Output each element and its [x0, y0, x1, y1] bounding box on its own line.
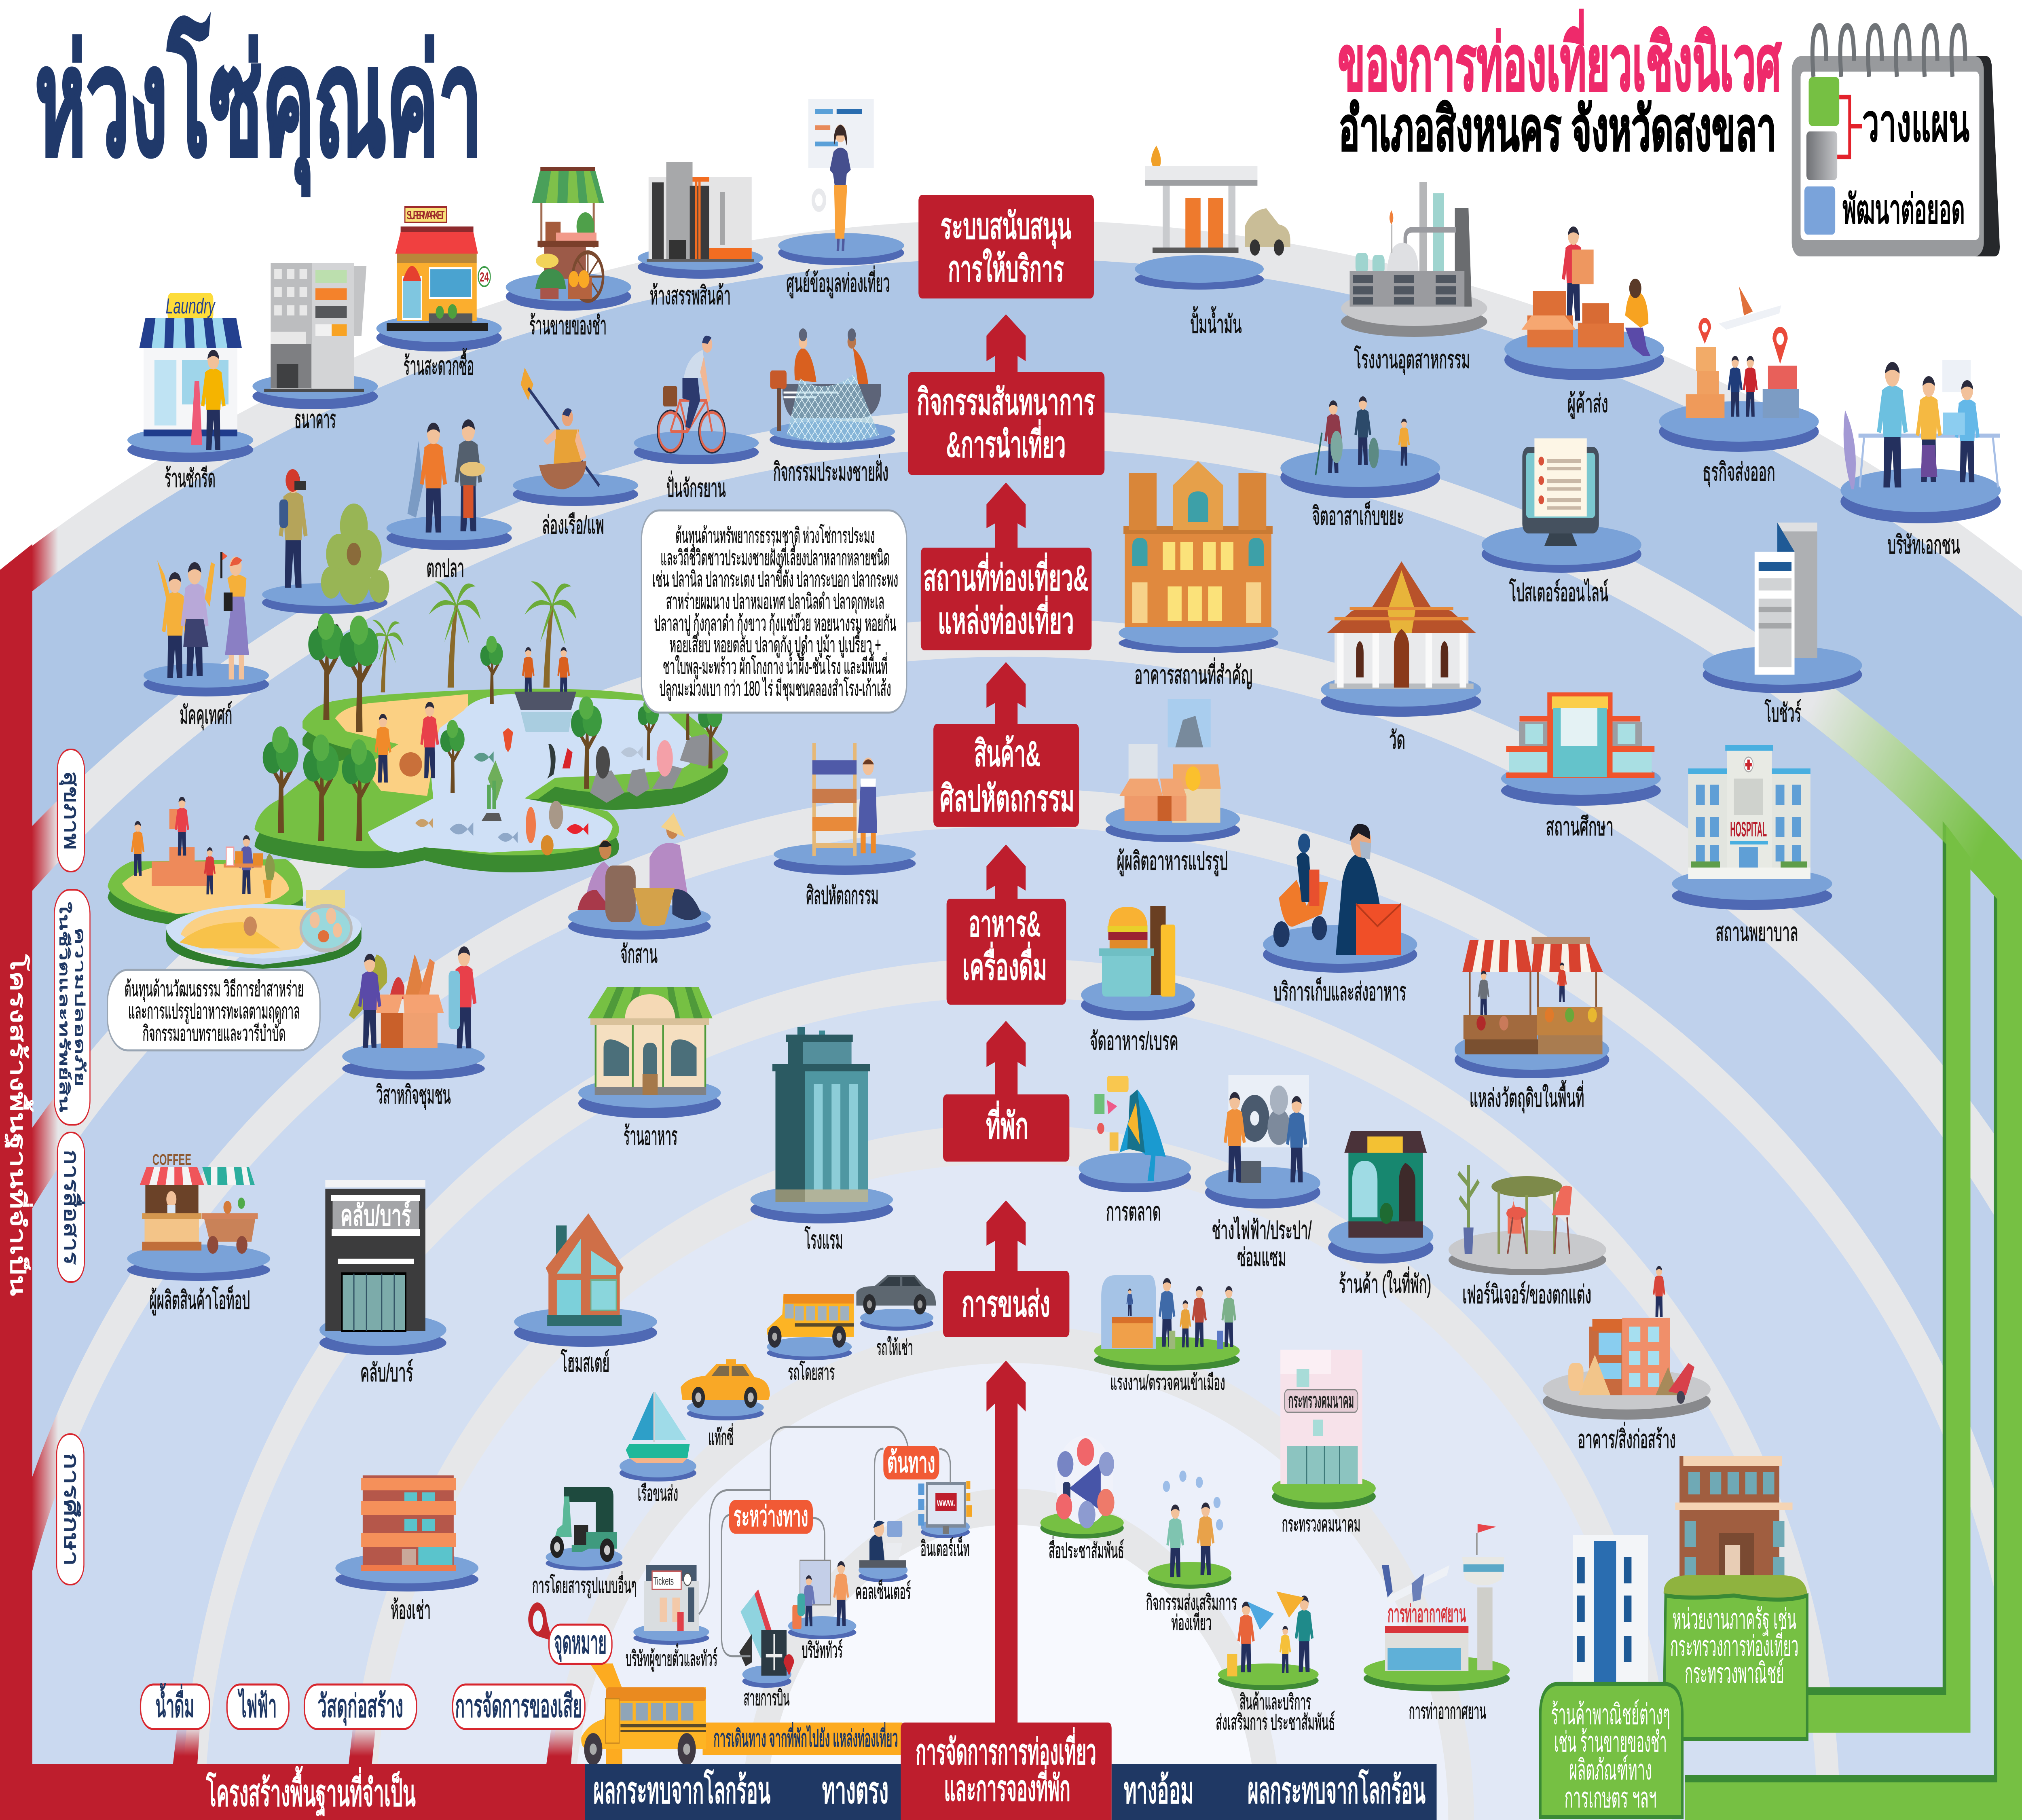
island: culture: [108, 797, 362, 969]
label: ธุรกิจส่งออก: [1703, 458, 1775, 487]
label: โฮมสเตย์: [561, 1349, 609, 1377]
box: support services: ระบบสนับสนุน: [941, 205, 1071, 249]
label: ห้างสรรพสินค้า: [650, 281, 731, 309]
green panel: government agencies: กระทรวงพาณิชย์: [1685, 1658, 1784, 1689]
bottom bar: essential infrastructure: [0, 1764, 585, 1820]
icon: export boxes, pins and plane: [1686, 286, 1799, 418]
destination pin and tag: [528, 1602, 612, 1664]
item: processed food: [1106, 699, 1240, 876]
pill: construction materials: [304, 1685, 417, 1729]
icon: school bus: [767, 1294, 854, 1348]
icon: ticket and runway: [739, 1589, 794, 1676]
label: ร้านค้า (ในที่พัก): [1339, 1266, 1431, 1298]
item: catering: [1081, 906, 1195, 1055]
arrow: [986, 844, 1026, 902]
label: จัดอาหาร/เบรค: [1090, 1027, 1178, 1055]
icon: passport control: [1101, 1275, 1236, 1349]
label: การโดยสารรูปแบบอื่นๆ: [532, 1571, 637, 1598]
icon: monitor with poster: [1522, 438, 1599, 546]
aquatic animals: [415, 728, 673, 855]
label: สื่อประชาสัมพันธ์: [1049, 1536, 1124, 1563]
icon: ticket booth: Tickets: [653, 1575, 674, 1587]
label: กิจกรรมประมงชายฝั่ง: [773, 454, 888, 486]
frame: green arc and green bars on the right: [1466, 488, 2022, 1820]
icon: school building: [1506, 692, 1654, 778]
label: ตกปลา: [426, 554, 464, 582]
fishermen and net: [514, 647, 576, 732]
green panel: government agencies: หน่วยงานภาครัฐ เช่น: [1673, 1604, 1796, 1636]
bottom bar: indirect impact: ผลกระทบจากโลกร้อน: [1248, 1769, 1426, 1811]
label: คอลเซ็นเตอร์: [855, 1579, 911, 1604]
icon: boxes and people: [1521, 226, 1650, 356]
item: club and bar: [319, 1180, 446, 1386]
arrow: [986, 662, 1026, 727]
label: ศิลปหัตถกรรม: [806, 881, 879, 909]
label two: ส่งเสริมการ ประชาสัมพันธ์: [1216, 1711, 1335, 1734]
item: food delivery: [1263, 824, 1417, 1005]
box: accommodation: [943, 1094, 1069, 1162]
label: แท๊กซี่: [708, 1423, 734, 1450]
label: บริการเก็บและส่งอาหาร: [1273, 977, 1406, 1005]
icon: heritage building: [1123, 461, 1273, 627]
box: goods and crafts: [933, 724, 1079, 827]
icon: government building: [1675, 1456, 1792, 1577]
label: เรือขนส่ง: [638, 1482, 678, 1505]
item: grocery: [506, 167, 631, 339]
item: immigration: [1094, 1275, 1240, 1395]
box: recreation: [908, 372, 1104, 475]
item: internet: [918, 1481, 972, 1561]
green panel: commercial shops: เช่น ร้านขายของชำ: [1554, 1727, 1667, 1758]
icon: factory: [1350, 182, 1472, 307]
label: คลับ/บาร์: [360, 1359, 413, 1386]
label: ปั้มน้ำมัน: [1190, 306, 1242, 338]
island: natural resources: [254, 581, 728, 872]
bottom bar: indirect impact: [1112, 1764, 1436, 1820]
icon: Thai temple: [1327, 561, 1476, 689]
text box: natural resources: สาหร่ายผมนาง ปลาหมอเทศ ปลานิลดำ ปลาดุกทะเล: [666, 590, 884, 614]
box: transport: การขนส่ง: [962, 1283, 1050, 1324]
icon: two anglers: [408, 419, 485, 533]
box: food and drink: [947, 899, 1066, 1005]
label one: สินค้าและบริการ: [1239, 1691, 1311, 1714]
item: local raw materials: [1455, 937, 1609, 1113]
icon: laundry shop: Laundry: [166, 294, 216, 318]
icon: tuk tuk: [550, 1487, 617, 1562]
icon: agent at desk: [859, 1521, 906, 1568]
item: rental rooms: [335, 1475, 478, 1624]
item: heritage buildings: [1119, 461, 1278, 689]
label one: กิจกรรมส่งเสริมการ: [1146, 1591, 1237, 1615]
item: education: [1501, 692, 1661, 840]
bottom bar: indirect impact: ทางอ้อม: [1124, 1770, 1193, 1811]
rocks: [590, 734, 725, 803]
label: อาคารสถานที่สำคัญ: [1134, 657, 1252, 689]
green panel: government agencies: [1664, 1456, 1807, 1739]
text box: natural resources: ต้นทุนด้านทรัพยากรธรรมชาติ ห่วงโซ่การประมง: [675, 523, 875, 548]
item: temple: [1321, 561, 1481, 754]
mangrove and fruit trees: [263, 613, 722, 841]
item: Ministry of Transport: [1272, 1350, 1376, 1536]
icon: paper planes and team: [1227, 1591, 1313, 1676]
label: โรงแรม: [804, 1226, 843, 1254]
central bar: tourism management: การจัดการการท่องเที่ยว: [916, 1727, 1096, 1772]
icon: green shop: [1344, 1131, 1427, 1238]
label: สายการบิน: [744, 1687, 790, 1710]
item: ticket agents: [626, 1565, 717, 1672]
pill: communication: [57, 1132, 85, 1282]
icon: club building: [325, 1180, 425, 1331]
icon: market stalls: [1462, 937, 1603, 1054]
left red column: [0, 544, 34, 1764]
label: โรงงานอุตสาหกรรม: [1354, 345, 1470, 375]
icon: office team: [1844, 360, 2000, 489]
icon: guide with tourists: [157, 552, 249, 679]
green panel: commercial shops: การเกษตร ฯลฯ: [1564, 1782, 1657, 1814]
tag: origin: ต้นทาง: [887, 1447, 935, 1479]
icon: ticket booth: [644, 1565, 699, 1631]
legend: calendar: [1792, 26, 2000, 256]
item: community product stall: [127, 1151, 270, 1316]
icon: delivery man and scooter: [1273, 824, 1401, 955]
item: waste volunteers: [1280, 396, 1440, 530]
stems from bottom bar: [173, 1729, 574, 1767]
label: ปั่นจักรยาน: [666, 470, 726, 502]
label: จิตอาสาเก็บขยะ: [1312, 501, 1404, 530]
icon: bank building: [264, 263, 366, 392]
item: fishing: [387, 419, 512, 582]
pill: waste management: การจัดการของเสีย: [455, 1688, 582, 1724]
text box: culture: ต้นทุนด้านวัฒนธรรม วิธีการยำสาหร่าย: [124, 978, 304, 1002]
subtitle: location: อำเภอสิงหนคร จังหวัดสงขลา: [1339, 95, 1776, 163]
label: โปสเตอร์ออนไลน์: [1509, 578, 1608, 606]
label: ร้านอาหาร: [624, 1122, 677, 1150]
box: recreation: &การนำเที่ยว: [946, 419, 1066, 465]
arrow: [986, 483, 1026, 551]
legend swatch: green: [1808, 77, 1839, 126]
pill: construction materials: วัสดุก่อสร้าง: [317, 1688, 403, 1726]
icon: sail boat: [626, 1392, 690, 1463]
icon: building under construction: [1568, 1266, 1694, 1404]
icon: taxi: [681, 1359, 770, 1408]
box: attractions: แหล่งท่องเที่ยว: [938, 595, 1074, 641]
legend swatch: blue: [1804, 186, 1835, 235]
icon: gas station: [1145, 146, 1290, 256]
box: transport: [943, 1271, 1069, 1337]
label: แรงงาน/ตรวจคนเข้าเมือง: [1110, 1371, 1225, 1395]
item: wholesaler: [1504, 226, 1664, 419]
item: taxi: [681, 1359, 770, 1450]
item: gas station: [1135, 146, 1290, 338]
icon: table, stools and plant: [1458, 1165, 1572, 1254]
box: attractions: สถานที่ท่องเที่ยว&: [923, 552, 1089, 598]
label: อินเตอร์เน็ท: [920, 1536, 970, 1561]
icon: ministry tower: [1280, 1350, 1362, 1484]
item: private company: [1840, 360, 2001, 559]
pill: drinking water: [141, 1682, 209, 1729]
box: support services: การให้บริการ: [948, 248, 1064, 289]
label: รถโดยสาร: [788, 1360, 835, 1384]
pill: health: [57, 749, 85, 872]
icon: apartment block: [361, 1475, 456, 1571]
icon: club building: คลับ/บาร์: [341, 1199, 411, 1232]
road to destination: [590, 1663, 622, 1764]
icon: supermarket: [387, 207, 490, 331]
item: tourism promotion: [1146, 1471, 1237, 1635]
connector lines: origin and en route: [699, 1427, 950, 1656]
item: information centre: [778, 99, 904, 298]
road band: travel from lodging to attractions: การเดินทาง จากที่พักไปยัง แหล่งท่องเที่ยว: [713, 1722, 898, 1752]
label: ร้านขายของชำ: [529, 311, 607, 339]
green panel: government agencies: กระทรวงการท่องเที่ยว: [1670, 1627, 1798, 1662]
text box: culture: และการแปรรูปอาหารทะเลตามฤดูกาล: [128, 1000, 300, 1024]
item: convenience store: [376, 207, 502, 380]
item: hospital: [1672, 745, 1832, 946]
item: furniture: [1449, 1165, 1606, 1308]
icon: hospital building: [1688, 745, 1810, 879]
pill: communication: การสื่อสาร: [61, 1149, 85, 1265]
pill: electricity: [227, 1685, 289, 1729]
label: บริษัทผู้ขายตั๋วและทัวร์: [626, 1644, 717, 1672]
icon: hotel tower: [772, 1027, 870, 1202]
label: บริษัทเอกชน: [1887, 531, 1960, 559]
box: food and drink: เครื่องดื่ม: [962, 941, 1047, 987]
label: มัคคุเทศก์: [180, 701, 232, 730]
text box: natural resources: ปลาลาปู กุ้งกุลาดำ กุ้งขาว กุ้งแช่บ๊วย หอยนางรม หอยกัน: [654, 612, 896, 636]
item: technicians: [1205, 1075, 1320, 1271]
text box: natural resources: หอยเสียบ หอยตลับ ปลาดูกัง ปูดำ ปูม้า ปูเปรี้ยว +: [669, 630, 881, 658]
label: ศูนย์ข้อมูลท่องเที่ยว: [786, 265, 890, 298]
label: ร้านซักรีด: [165, 464, 216, 492]
label: วัด: [1389, 726, 1405, 754]
arrow: [986, 1021, 1026, 1096]
pill: education: การศึกษา: [61, 1453, 82, 1566]
box: attractions: [921, 548, 1091, 650]
label: ร้านสะดวกซื้อ: [404, 348, 474, 380]
left red column: โครงสร้างพื้นฐานที่จำเป็น: [4, 954, 34, 1296]
central bar: tourism management: และการจองที่พัก: [944, 1763, 1070, 1808]
icon: fishing boat and net: [770, 328, 881, 443]
label: สถานพยาบาล: [1715, 918, 1798, 946]
subtitle: pink: ของการท่องเที่ยวเชิงนิเวศ: [1338, 9, 1782, 106]
label: รถให้เช่า: [876, 1335, 913, 1360]
road band: travel from lodging to attractions: [703, 1722, 902, 1755]
icon: woman with info board: [808, 99, 874, 251]
icon: craft shelves and woman: [812, 743, 877, 856]
item: promotional goods: [1216, 1591, 1335, 1734]
label: แหล่งวัตถุดิบในพื้นที่: [1470, 1080, 1584, 1113]
label: อาคาร/สิ่งก่อสร้าง: [1578, 1422, 1676, 1453]
item: homestay: [514, 1213, 657, 1377]
text box: culture: กิจกรรมอาบทรายและวารีบำบัด: [143, 1022, 286, 1045]
box: goods and crafts: ศิลปหัตถกรรม: [940, 778, 1074, 819]
text box: natural resources: เช่น ปลานิล ปลากระเตง ปลาขี้ตัง ปลากระบอก ปลากระพง: [652, 564, 898, 591]
item: crafts: [774, 743, 916, 909]
pill: safety: ในชีวิตและทรัพย์สิน: [57, 902, 72, 1113]
icon: brochure: [1755, 523, 1817, 675]
item: rafting: [513, 368, 638, 539]
box: goods and crafts: สินค้า&: [974, 733, 1040, 774]
item: online poster: [1482, 438, 1641, 606]
label: ผู้ค้าส่ง: [1567, 389, 1608, 419]
item: shop in lodging: [1328, 1131, 1433, 1298]
label: ผู้ผลิตสินค้าโอท็อป: [149, 1285, 250, 1316]
sand bath and hot spring: [180, 890, 351, 950]
item: basketry: [568, 813, 711, 968]
tag: en route: ระหว่างทาง: [734, 1501, 808, 1532]
item: laundry: [127, 293, 253, 492]
label: วิสาหกิจชุมชน: [376, 1081, 451, 1110]
villagers and boxes: [131, 797, 275, 898]
icon: megaphone with media bubbles: [1055, 1436, 1115, 1528]
item: call centre: [855, 1521, 911, 1604]
text box: natural resources: ปลูกมะม่วงเบา กว่า 180 ไร่ มีชุมชนคลองสำโรง-เก้าเส้ง: [659, 676, 891, 701]
icon: grocery cart: [532, 167, 604, 301]
bottom bar: direct impact: [585, 1764, 901, 1820]
icon: coffee stall and cart: COFFEE: [152, 1151, 191, 1168]
icon: tour map: [792, 1560, 849, 1629]
pill: safety: [54, 890, 90, 1125]
label: จักสาน: [620, 940, 658, 968]
icon: burger, box and drink: [1099, 906, 1175, 997]
pill: health: สุขภาพ: [59, 771, 82, 850]
icon: food boxes: [1119, 699, 1221, 823]
label: บริษัททัวร์: [802, 1639, 843, 1662]
item: restaurant: [578, 987, 721, 1150]
box: food and drink: อาหาร&: [969, 903, 1041, 944]
legend swatch: grey: [1806, 131, 1837, 180]
label: ธนาคาร: [294, 405, 336, 433]
label: โบชัวร์: [1764, 699, 1801, 727]
legend label: develop: พัฒนาต่อยอด: [1842, 187, 1965, 232]
icon: homestay house: [546, 1213, 624, 1326]
icon: airport terminal and tower: การท่าอากาศยาน: [1387, 1601, 1466, 1627]
palm trees: [368, 581, 577, 692]
icon: supermarket: 24: [480, 270, 489, 284]
icon: bird watcher and tree: [279, 469, 389, 605]
green panel: commercial shops: [1540, 1535, 1682, 1817]
label two: ท่องเที่ยว: [1171, 1608, 1212, 1635]
box: accommodation: ที่พัก: [986, 1100, 1028, 1146]
central column of value chain boxes and arrows: [908, 195, 1104, 1725]
icon: laundry shop: [139, 293, 242, 450]
icon: mall building: [647, 162, 754, 262]
label: การตลาด: [1106, 1198, 1161, 1225]
icon: coffee stall and cart: [140, 1151, 258, 1254]
item: hotel: [751, 1027, 893, 1254]
green panel: commercial shops: ร้านค้าพาณิชย์ต่างๆ: [1551, 1699, 1670, 1731]
pill: electricity: ไฟฟ้า: [237, 1688, 277, 1724]
icon: supermarket: SUPERMARKET: [407, 209, 444, 222]
arrow: [986, 1200, 1026, 1274]
box: recreation: กิจกรรมสันทนาการ: [917, 381, 1095, 422]
icon: volunteers collecting garbage: [1316, 396, 1410, 475]
icon: monitor www: www.: [937, 1496, 955, 1509]
text box: natural resources: ชาใบพลู-มะพร้าว ผักโกงกาง น้ำผึ้ง-ชันโรง และมีพื้นที่: [663, 652, 888, 679]
icon: grey sedan: [857, 1275, 936, 1314]
destination pin and tag: จุดหมาย: [554, 1625, 607, 1663]
icon: ministry tower: กระทรวงคมนาคม: [1288, 1389, 1354, 1412]
item: marketing: [1079, 1076, 1191, 1225]
title: ห่วงโซ่คุณค่า: [35, 14, 482, 196]
label: ช่างไฟฟ้า/ประปา/: [1212, 1216, 1312, 1244]
label: สถานศึกษา: [1546, 813, 1614, 840]
icon: produce box: [349, 946, 476, 1048]
villagers planting: [374, 702, 439, 783]
icon: gears and workers: [1224, 1075, 1309, 1183]
arrow: [986, 314, 1026, 375]
central bar: tourism management: [901, 1723, 1112, 1820]
text box: natural resources: [641, 510, 907, 713]
icon: blue tower: [1573, 1535, 1648, 1684]
label: ล่องเรือ/แพ: [542, 511, 604, 539]
item: other transit: [532, 1487, 637, 1598]
pill: drinking water: น้ำดื่ม: [156, 1682, 194, 1724]
item: airline: [739, 1589, 794, 1710]
item: export: [1659, 286, 1819, 487]
item: mall: [638, 162, 763, 309]
item: airport: [1364, 1524, 1510, 1723]
icon: monitor www: [918, 1481, 972, 1534]
icon: restaurant building: [588, 987, 713, 1095]
box: support services: [918, 195, 1094, 298]
item: passenger bus: [767, 1294, 854, 1384]
sand island: [108, 859, 362, 969]
label: ผู้ผลิตอาหารแปรรูป: [1117, 847, 1228, 876]
label: ดูนก: [316, 616, 340, 645]
item: bank: [252, 263, 378, 433]
label: ห้องเช่า: [391, 1596, 431, 1624]
bottom bar: direct impact: ทางตรง: [822, 1770, 888, 1811]
text box: natural resources: และวิถีชีวิตชาวประมงชายฝั่งที่เลี้ยงปลาหลากหลายชนิด: [660, 543, 890, 570]
label: การท่าอากาศยาน: [1409, 1700, 1486, 1723]
item: tour guide: [144, 552, 269, 730]
item: cargo boat: [620, 1392, 696, 1505]
icon: school bus on road: [581, 1687, 706, 1765]
item: bird watching: [262, 469, 389, 645]
pill: safety: ความปลอดภัย: [72, 927, 88, 1087]
bottom bar: direct impact: ผลกระทบจากโลกร้อน: [593, 1769, 770, 1811]
item: coastal fishing: [770, 328, 895, 486]
text box: culture: [108, 970, 320, 1050]
item: factory: [1341, 182, 1487, 375]
item: cycling: [634, 336, 759, 502]
label: เฟอร์นิเจอร์/ของตกแต่ง: [1462, 1280, 1591, 1308]
icon: paddler: [521, 368, 599, 489]
arrow from transport to tourism management: [986, 1361, 1026, 1725]
label line two: ซ่อมแซม: [1237, 1243, 1286, 1271]
icon: cyclist: [658, 336, 725, 453]
legend label: plan: วางแผน: [1862, 93, 1969, 152]
icon: hospital building: HOSPITAL: [1730, 818, 1767, 841]
pill: waste management: [453, 1685, 585, 1729]
item: brochure: [1703, 523, 1862, 727]
icon: airport terminal and tower: [1382, 1524, 1504, 1671]
label: กระทรวงคมนาคม: [1282, 1513, 1360, 1536]
bottom bar: essential infrastructure: โครงสร้างพื้นฐานที่จำเป็น: [206, 1765, 416, 1817]
icon: megaphone: [1094, 1076, 1165, 1181]
icon: women weaving baskets: [577, 813, 701, 926]
item: rental car: [857, 1275, 936, 1360]
icon: travelers with icons: [1163, 1471, 1223, 1577]
item: community enterprise: [342, 946, 485, 1110]
green panel: commercial shops: ผลิตภัณฑ์ทาง: [1569, 1754, 1652, 1786]
item: PR media: [1040, 1436, 1124, 1563]
item: construction: [1543, 1266, 1711, 1453]
item: tour company: [788, 1560, 857, 1662]
